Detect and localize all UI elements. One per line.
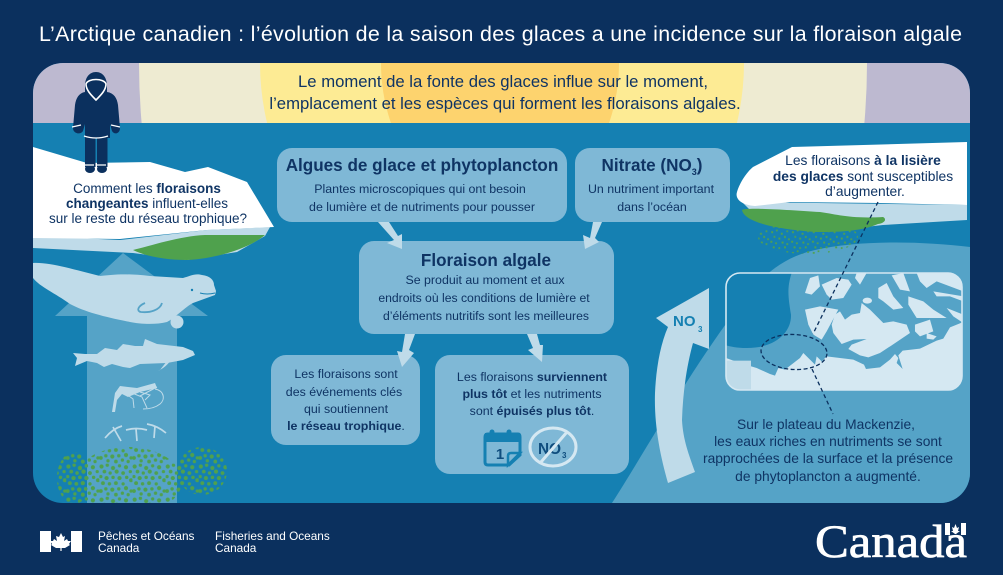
text: Mackenzie: les eaux riches en nutriments se sont — [714, 434, 942, 449]
icon: person in parka — [72, 72, 120, 173]
text: iceberg question: changeantes influent-elles — [66, 196, 228, 211]
icon: small flag — [945, 523, 966, 535]
text: Mackenzie: rapprochées de la surface et la présence — [703, 451, 953, 466]
text: Mackenzie: de phytoplancton a augmenté. — [735, 469, 921, 484]
box: nitrate: 3 — [692, 167, 697, 177]
box: algues de glace et phytoplancton: de lumière et de nutriments pour pousser — [309, 200, 535, 214]
icon: no nitrate — [530, 428, 576, 466]
text: iceberg question: Comment les floraisons — [73, 181, 221, 196]
box: nitrate: ) — [697, 156, 702, 175]
text: ice edge blooms: d’augmenter. — [825, 184, 905, 199]
box: floraisons plus tôt: sont épuisés plus tôt. — [470, 404, 594, 418]
icon: calendar: 1 — [496, 446, 504, 463]
box: algues de glace et phytoplancton: Algues de glace et phytoplancton — [286, 156, 558, 175]
text: iceberg question — [49, 181, 247, 226]
box: événements clés: Les floraisons sont — [294, 367, 398, 381]
panel: main scene — [33, 63, 970, 503]
logo: government signature: Pêches et Océans — [98, 529, 194, 543]
dashed leader lines — [812, 202, 878, 414]
box: événements clés: des événements clés — [286, 385, 402, 399]
icon: no nitrate: 3 — [562, 451, 567, 460]
title: L’Arctique canadien : l’évolution de la saison des glaces a une incidence sur la floraison algale — [39, 22, 962, 46]
text: Mackenzie — [703, 417, 953, 484]
logo: government signature: Canada — [98, 541, 140, 555]
map: Mackenzie shelf — [726, 273, 963, 391]
box: nitrate: dans l’océan — [617, 200, 687, 214]
text: ice edge blooms: Les floraisons à la lisière — [785, 153, 941, 168]
box: nitrate — [575, 148, 730, 222]
text: sky statement — [269, 72, 741, 113]
lighter water region — [612, 242, 970, 503]
phytoplankton cloud: left — [57, 447, 227, 503]
iceberg: right — [737, 142, 967, 254]
box: floraison algale: Se produit au moment et aux — [405, 273, 565, 287]
box: événements clés — [271, 355, 420, 445]
icon: shrimp — [112, 383, 163, 412]
arrow: nitrate to floraison — [583, 222, 602, 249]
arrow: floraison to événements — [397, 334, 415, 367]
box: floraison algale: endroits où les conditions de lumière et — [378, 291, 590, 305]
text: sky statement: Le moment de la fonte des glaces influe sur le moment, — [298, 72, 708, 91]
text: Mackenzie: Sur le plateau du Mackenzie, — [737, 417, 915, 432]
logo: government signature: Canada — [215, 541, 257, 555]
icon: calendar — [485, 430, 520, 465]
text: sky statement: l’emplacement et les espèces qui forment les floraisons algales. — [269, 94, 741, 113]
box: floraisons plus tôt: plus tôt et les nutriments — [462, 387, 602, 401]
box: floraison algale — [359, 241, 614, 334]
logo: government signature: Fisheries and Oceans — [215, 529, 330, 543]
arrow: NO3 upwelling: NO — [673, 313, 696, 330]
large upward arrow — [55, 253, 208, 503]
logo: Canada wordmark: Canada — [815, 516, 967, 568]
box: événements clés: le réseau trophique. — [287, 419, 405, 433]
text: iceberg question: sur le reste du réseau trophique? — [49, 211, 247, 226]
dashed callout ellipse — [760, 333, 828, 371]
arrow: algues to floraison — [378, 222, 402, 249]
box: floraison algale: Floraison algale — [421, 251, 551, 270]
text: ice edge blooms: des glaces sont susceptibles — [773, 169, 953, 184]
box: nitrate: Un nutriment important — [588, 182, 715, 196]
arrow: floraison to plus tôt — [527, 334, 543, 362]
icon: flag — [40, 531, 82, 552]
iceberg: left — [33, 147, 274, 260]
box: événements clés: qui soutiennent — [304, 402, 389, 416]
ocean background — [33, 63, 970, 503]
icon: fish — [73, 339, 195, 372]
box: algues de glace et phytoplancton: Plantes microscopiques qui ont besoin — [314, 182, 526, 196]
box: floraisons plus tôt — [435, 355, 629, 474]
icon: no nitrate: NO — [538, 441, 561, 458]
box: floraison algale: d’éléments nutritifs sont les meilleures — [383, 309, 589, 323]
arrow: NO3 upwelling — [655, 288, 709, 483]
box: algues de glace et phytoplancton — [277, 148, 567, 222]
icon: beluga whale — [33, 263, 216, 328]
text: ice edge blooms — [773, 153, 953, 199]
logo: government signature — [40, 529, 330, 555]
arrow: NO3 upwelling: 3 — [698, 325, 703, 334]
sky with sun — [33, 63, 970, 123]
box: nitrate: Nitrate (NO — [602, 156, 692, 175]
icon: copepods — [105, 424, 166, 441]
box: floraisons plus tôt: Les floraisons surviennent — [457, 370, 607, 384]
